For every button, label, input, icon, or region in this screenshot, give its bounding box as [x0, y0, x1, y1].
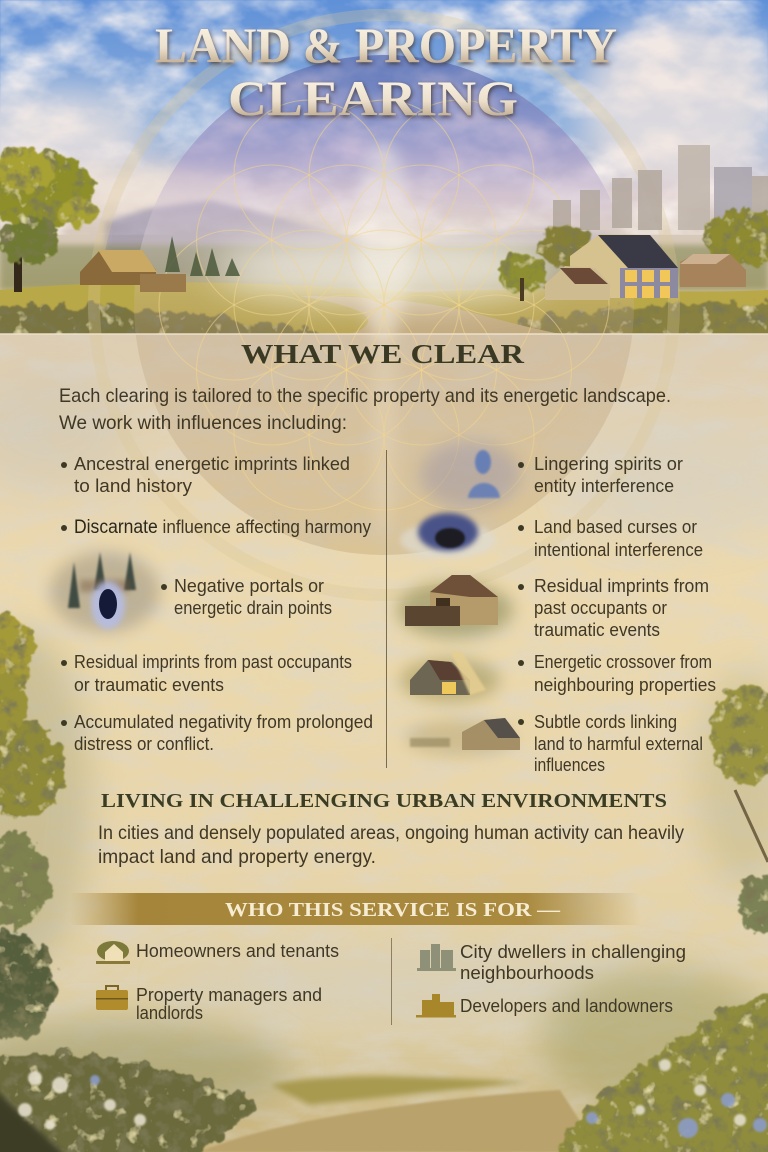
bullet: residual imprints — [518, 575, 709, 640]
bullet: negative portals — [161, 575, 332, 618]
left tree border — [0, 614, 90, 1040]
bullet: negative portals: Negative portals or — [174, 575, 324, 596]
title: LAND & PROPERTY — [155, 17, 617, 73]
treeline and meadow — [0, 245, 768, 290]
heading: urban environments: LIVING IN CHALLENGING URBAN ENVIRONMENTS — [101, 790, 667, 812]
item: property managers: landlords — [136, 1002, 203, 1023]
bullet: energetic crossover: neighbouring properties — [534, 674, 716, 695]
icon: spirit silhouette — [420, 441, 520, 509]
bullet: energetic crossover: Energetic crossover from — [534, 651, 712, 672]
background: parchment sky — [0, 334, 768, 1152]
bottom foliage and path — [0, 970, 768, 1152]
bullet: subtle cords: influences — [534, 754, 605, 775]
intro text: We work with influences including: — [59, 412, 347, 434]
icon: dark vortex — [400, 513, 496, 558]
bullet: subtle cords — [518, 711, 703, 775]
right tree border — [695, 670, 768, 933]
item: property managers — [96, 984, 322, 1023]
bullet: accumulated negativity — [61, 711, 373, 754]
item: property managers: Property managers and — [136, 984, 322, 1005]
icon: glowing portal figure — [50, 552, 160, 632]
bullet: discarnate influence: Discarnate influence affecting harmony — [74, 516, 372, 538]
bullet: land based curses — [518, 516, 703, 560]
urban text: In cities and densely populated areas, ongoing human activity can heavily — [98, 822, 684, 844]
icon: neighbourhood house — [405, 718, 520, 756]
urban text — [98, 822, 684, 868]
icon: development blocks — [416, 994, 456, 1018]
heading: what we clear: WHAT WE CLEAR — [241, 339, 525, 369]
city skyline — [553, 145, 768, 230]
bullet: ancestral imprints: Ancestral energetic imprints linked — [74, 453, 350, 474]
bullet: subtle cords: Subtle cords linking — [534, 711, 677, 732]
left tree — [0, 148, 98, 292]
icon: city buildings — [417, 944, 456, 971]
list: right influences — [518, 453, 716, 775]
parchment top edge — [0, 333, 768, 335]
garden trees — [499, 210, 768, 292]
road — [300, 296, 560, 334]
distant mountains — [105, 200, 384, 275]
bullet: ancestral imprints: to land history — [74, 475, 193, 496]
bullet: residual imprints: or traumatic events — [74, 674, 224, 695]
bullet: residual imprints — [61, 651, 352, 695]
icon: house with energy crossover — [400, 650, 500, 702]
bullet: accumulated negativity: distress or conflict. — [74, 733, 214, 754]
item: city dwellers: neighbourhoods — [460, 962, 594, 983]
sacred geometry medallion — [94, 15, 674, 595]
icon: home with tree — [96, 941, 130, 964]
intro text: Each clearing is tailored to the specific property and its energetic landscape. — [59, 385, 671, 407]
bullet: lingering spirits: Lingering spirits or — [534, 453, 683, 474]
bullet: residual imprints: Residual imprints from past occupants — [74, 651, 352, 672]
item: city dwellers — [417, 941, 686, 983]
sky with clouds — [0, 0, 768, 292]
bullet: lingering spirits: entity interference — [534, 475, 674, 496]
item: developers: Developers and landowners — [460, 995, 673, 1016]
bullet: negative portals: energetic drain points — [174, 597, 332, 618]
bullet: ancestral imprints — [61, 453, 350, 496]
icon: briefcase — [96, 986, 128, 1010]
icon: old house — [397, 575, 513, 638]
bullet: accumulated negativity: Accumulated negativity from prolonged — [74, 711, 373, 732]
bullet: energetic crossover — [518, 651, 716, 695]
item: city dwellers: City dwellers in challenging — [460, 941, 686, 962]
title — [155, 17, 617, 126]
list: left influences — [50, 453, 373, 754]
farmhouse and cottages — [545, 234, 746, 300]
pine trees — [165, 236, 240, 276]
bullet: residual imprints: traumatic events — [534, 619, 660, 640]
intro text — [59, 385, 671, 434]
item: homeowners: Homeowners and tenants — [136, 940, 339, 961]
hero landscape scene — [0, 0, 768, 340]
bullet: land based curses: intentional interference — [534, 539, 703, 560]
bullet: subtle cords: land to harmful external — [534, 733, 703, 754]
farm barn — [80, 250, 186, 292]
urban text: impact land and property energy. — [98, 846, 376, 868]
hero foreground buildings and trees — [0, 145, 768, 301]
bullet: land based curses: Land based curses or — [534, 516, 697, 537]
bullet: lingering spirits — [518, 453, 683, 496]
banner: who this service is for: WHO THIS SERVICE IS FOR — — [225, 899, 561, 921]
bullet: residual imprints: past occupants or — [534, 597, 667, 618]
title: CLEARING — [228, 70, 518, 126]
banner: who this service is for — [70, 893, 640, 925]
audience divider — [390, 938, 392, 1025]
centre divider — [386, 450, 388, 768]
bullet: residual imprints: Residual imprints from — [534, 575, 709, 596]
